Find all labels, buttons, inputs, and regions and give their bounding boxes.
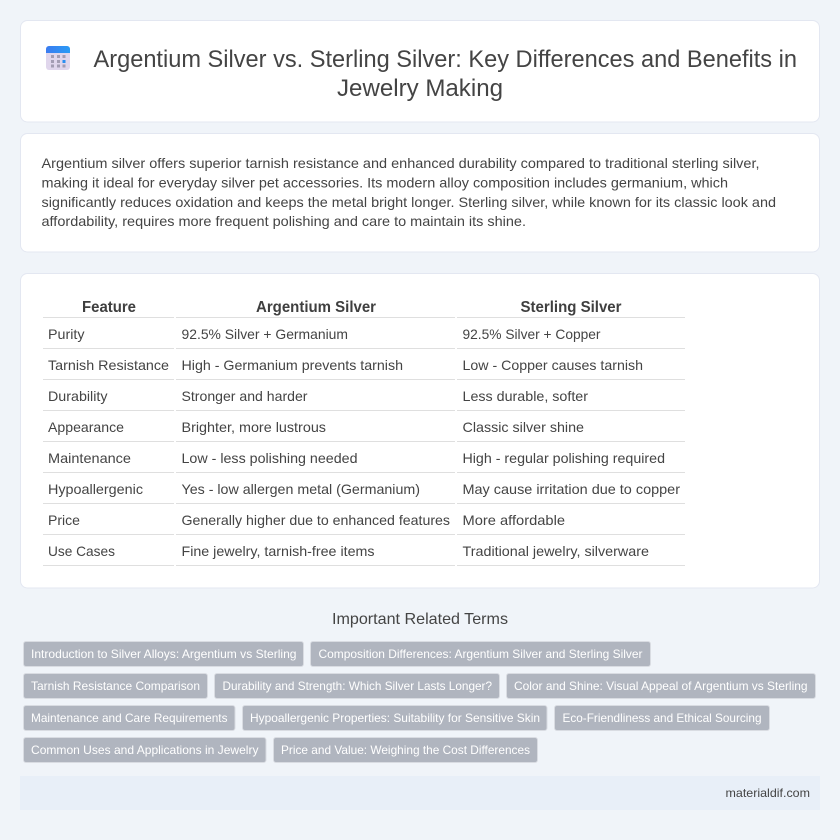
row: hypoallergenic	[43, 481, 685, 504]
row: hypoallergenic: Hypoallergenic	[48, 481, 143, 497]
title	[94, 46, 797, 102]
row: appearance: Classic silver shine	[462, 419, 584, 435]
chip	[214, 674, 500, 698]
header panel	[20, 20, 820, 122]
title: Argentium Silver vs. Sterling Silver: Key Differences and Benefits in	[94, 46, 797, 73]
row: price: Price	[48, 512, 80, 528]
panel: intro summary	[20, 134, 820, 252]
intro paragraph: making it ideal for everyday silver pet accessories. Its modern alloy composition includes germanium, which	[42, 174, 728, 190]
row: durability: Less durable, softer	[462, 388, 588, 404]
row: price: Generally higher due to enhanced features	[182, 512, 450, 528]
row: tarnish resistance: High - Germanium prevents tarnish	[182, 357, 403, 373]
intro paragraph: significantly reduces oxidation and keeps the metal bright longer. Sterling silver, while known for its classic look and	[42, 194, 776, 210]
chip	[242, 706, 547, 730]
chip	[554, 706, 770, 730]
row: use cases: Fine jewelry, tarnish-free items	[182, 543, 374, 559]
row: maintenance	[43, 450, 685, 473]
row: hypoallergenic: May cause irritation due to copper	[462, 481, 680, 497]
row: purity: Purity	[48, 326, 84, 342]
chip: Color and Shine: Visual Appeal of Argentium vs Sterling	[514, 679, 808, 693]
heading: important related terms: Important Related Terms	[332, 611, 508, 628]
footer bar	[20, 776, 820, 810]
chip: Composition Differences: Argentium Silver and Sterling Silver	[318, 647, 642, 661]
row: price	[43, 512, 685, 535]
chip: Introduction to Silver Alloys: Argentium vs Sterling	[31, 647, 296, 661]
chip: Common Uses and Applications in Jewelry	[31, 743, 258, 757]
chip	[24, 706, 235, 730]
row: appearance	[43, 419, 685, 442]
icon: calendar	[46, 46, 70, 70]
footer source: materialdif.com	[726, 786, 810, 800]
title: Jewelry Making	[337, 75, 503, 102]
row: durability: Stronger and harder	[182, 388, 308, 404]
row: use cases: Use Cases	[48, 543, 115, 559]
chip: Tarnish Resistance Comparison	[31, 679, 200, 693]
chip	[274, 738, 538, 762]
chip	[310, 642, 650, 666]
row: purity: 92.5% Silver + Copper	[462, 326, 601, 342]
chip: Eco-Friendliness and Ethical Sourcing	[562, 711, 762, 725]
chip	[24, 674, 208, 698]
related terms chips	[24, 642, 816, 762]
table header row: Feature	[82, 299, 136, 316]
table header row: Sterling Silver	[520, 299, 622, 316]
row: use cases	[43, 543, 685, 566]
row: appearance: Appearance	[48, 419, 124, 435]
row: purity	[43, 326, 685, 349]
chip	[506, 674, 816, 698]
intro paragraph: Argentium silver offers superior tarnish resistance and enhanced durability compared to traditional sterling silver,	[42, 155, 760, 171]
intro paragraph: affordability, requires more frequent polishing and care to maintain its shine.	[42, 213, 526, 229]
row: hypoallergenic: Yes - low allergen metal (Germanium)	[182, 481, 420, 497]
row: purity: 92.5% Silver + Germanium	[182, 326, 348, 342]
row: tarnish resistance: Tarnish Resistance	[48, 357, 169, 373]
row: durability	[43, 388, 685, 411]
row: price: More affordable	[462, 512, 565, 528]
row: use cases: Traditional jewelry, silverware	[462, 543, 649, 559]
row: tarnish resistance	[43, 357, 685, 380]
chip	[24, 738, 266, 762]
intro paragraph	[42, 155, 776, 229]
row: maintenance: High - regular polishing required	[462, 450, 665, 466]
table header row	[43, 299, 685, 318]
row: maintenance: Low - less polishing needed	[182, 450, 358, 466]
row: appearance: Brighter, more lustrous	[182, 419, 326, 435]
row: maintenance: Maintenance	[48, 450, 131, 466]
chip: Hypoallergenic Properties: Suitability for Sensitive Skin	[250, 711, 540, 725]
table header row: Argentium Silver	[256, 299, 376, 316]
row: tarnish resistance: Low - Copper causes tarnish	[462, 357, 643, 373]
panel: comparison table	[20, 274, 820, 588]
chip: Price and Value: Weighing the Cost Differences	[281, 743, 530, 757]
chip: Maintenance and Care Requirements	[31, 711, 228, 725]
chip: Durability and Strength: Which Silver Lasts Longer?	[222, 679, 492, 693]
chip	[24, 642, 304, 666]
row: durability: Durability	[48, 388, 108, 404]
